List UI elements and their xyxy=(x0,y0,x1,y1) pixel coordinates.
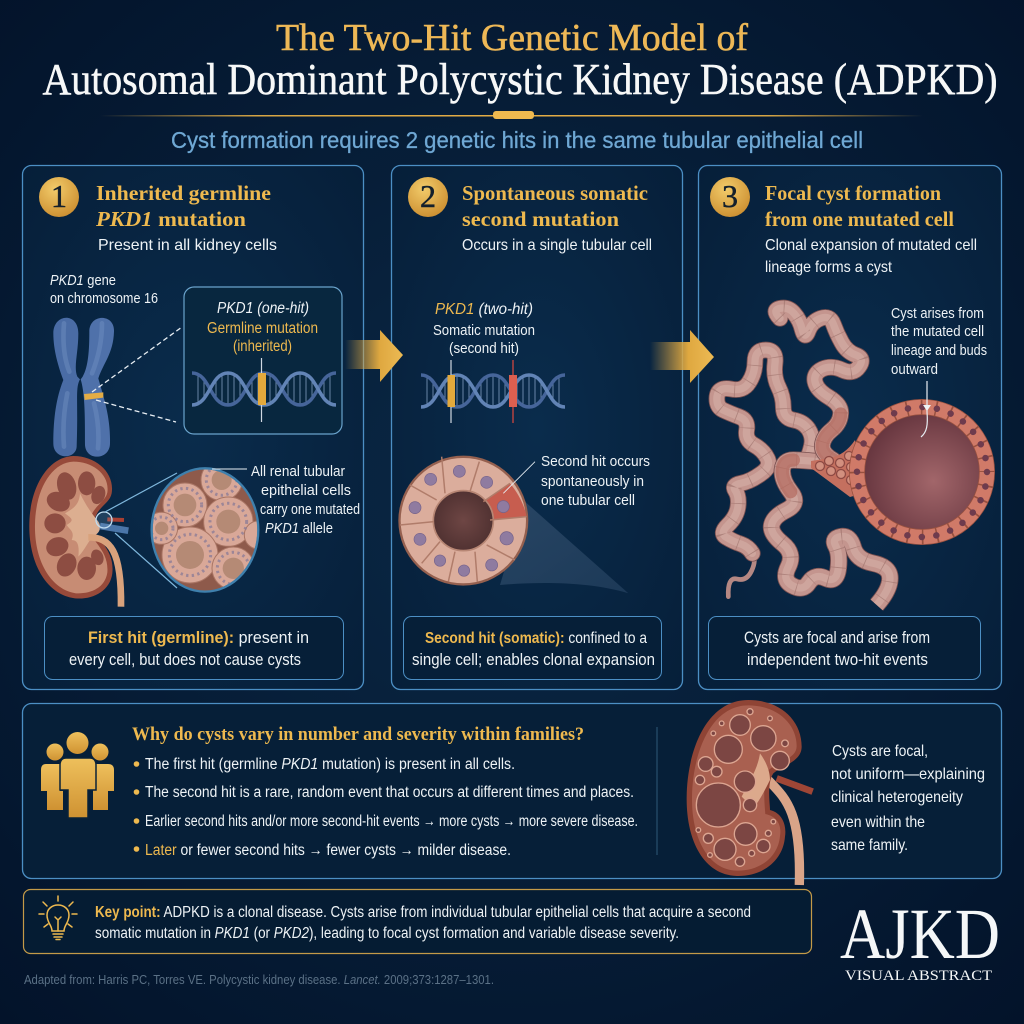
step 1 number badge xyxy=(39,177,79,217)
key point text xyxy=(95,904,751,942)
callout: PKD1 one-hit DNA: Germline mutation xyxy=(207,320,318,337)
key point text: Key point: ADPKD is a clonal disease. Cysts arise from individual tubular epithelial cells that acquire a second xyxy=(95,904,751,921)
gene location label xyxy=(50,273,158,307)
step 3 heading: from one mutated cell xyxy=(765,207,954,231)
gene location label: on chromosome 16 xyxy=(50,291,158,307)
title: The Two-Hit Genetic Model of xyxy=(276,17,748,59)
text: clinical heterogeneity note xyxy=(831,743,985,854)
label: second hit: one tubular cell xyxy=(541,492,635,509)
text: clinical heterogeneity note: not uniform—explaining xyxy=(831,766,985,783)
step 2 number badge xyxy=(408,177,448,217)
arrow: step 2 to step 3 xyxy=(650,330,714,383)
two-hit DNA diagram: Somatic mutation xyxy=(433,322,535,339)
two-hit DNA diagram xyxy=(421,301,565,423)
callout: PKD1 one-hit DNA: PKD1 (one-hit) xyxy=(217,300,309,317)
step 2 description: Occurs in a single tubular cell xyxy=(462,237,652,254)
step 2 number badge: 2 xyxy=(420,178,436,214)
step 1 heading xyxy=(95,181,271,231)
step 1 number badge: 1 xyxy=(51,178,67,214)
step 1 heading: Inherited germline xyxy=(96,181,271,205)
panel: step 2 somatic second mutation xyxy=(392,166,682,690)
text: clinical heterogeneity note: same family. xyxy=(831,837,908,854)
label: cyst origin: Cyst arises from xyxy=(891,306,984,322)
label: all renal cells: epithelial cells xyxy=(261,482,351,499)
key point text: somatic mutation in PKD1 (or PKD2), leading to focal cyst formation and variable disease severity. xyxy=(95,925,679,942)
callout: PKD1 one-hit DNA xyxy=(184,287,342,434)
callout: focal cysts: Cysts are focal and arise from xyxy=(744,629,930,647)
label: all renal cells: All renal tubular xyxy=(251,463,345,480)
callout: first hit: every cell, but does not cause cysts xyxy=(69,651,301,669)
text: clinical heterogeneity note: clinical heterogeneity xyxy=(831,789,963,806)
callout: second hit: single cell; enables clonal expansion xyxy=(412,651,655,669)
title divider xyxy=(100,111,923,119)
step 1 heading: PKD1 mutation xyxy=(95,207,246,231)
step 3 description xyxy=(765,237,977,276)
callout: second hit xyxy=(404,616,662,680)
label: second hit: Second hit occurs xyxy=(541,453,650,470)
label: cyst origin: the mutated cell xyxy=(891,324,984,340)
callout: first hit: First hit (germline): present in xyxy=(88,629,309,647)
panel: step 3 focal cyst formation xyxy=(698,166,1002,690)
step 3 number badge: 3 xyxy=(722,178,738,214)
text: clinical heterogeneity note: even within the xyxy=(831,814,925,831)
illustration: polycystic kidney xyxy=(687,700,813,885)
callout: first hit xyxy=(44,616,344,680)
step 2 heading: Spontaneous somatic xyxy=(462,181,648,205)
label: cyst origin: outward xyxy=(891,362,938,378)
callout: PKD1 one-hit DNA: (inherited) xyxy=(233,338,292,355)
icon: chromosome 16 xyxy=(53,318,114,457)
citation: Adapted from: Harris PC, Torres VE. Polycystic kidney disease. Lancet. 2009;373:1287–1301. xyxy=(24,972,494,987)
label: all renal cells: carry one mutated xyxy=(260,501,360,518)
dashed zoom lines xyxy=(92,327,182,422)
subtitle: Cyst formation requires 2 genetic hits in the same tubular epithelial cell xyxy=(171,127,863,153)
zoom lines to magnified view xyxy=(105,473,177,588)
step 3 heading xyxy=(765,181,954,231)
bullet list: The first hit (germline PKD1 mutation) is present in all cells. xyxy=(145,756,515,773)
bullet list xyxy=(134,756,638,859)
illustration: convoluted tubules xyxy=(717,308,890,605)
icon: lightbulb xyxy=(39,896,77,940)
step 3 description: Clonal expansion of mutated cell xyxy=(765,237,977,254)
logo: AJKD visual abstract: AJKD xyxy=(840,894,1000,974)
illustration: tubule ring with one mutated cell xyxy=(398,456,628,593)
callout: focal cysts xyxy=(708,616,980,680)
question heading: Why do cysts vary in number and severity within families? xyxy=(132,724,584,745)
bullet list: Earlier second hits and/or more second-hit events → more cysts → more severe disease. xyxy=(145,813,638,830)
step 3 heading: Focal cyst formation xyxy=(765,181,941,205)
illustration: magnified tubule cross-sections xyxy=(150,467,260,593)
panel: step 1 inherited germline mutation xyxy=(22,166,364,690)
step 3 description: lineage forms a cyst xyxy=(765,259,892,276)
callout: focal cysts: independent two-hit events xyxy=(747,651,928,669)
label: cyst origin: lineage and buds xyxy=(891,343,987,359)
label: all renal cells xyxy=(212,463,360,537)
step 2 heading xyxy=(462,181,648,231)
illustration: cyst budding from the tubule xyxy=(811,381,995,545)
label: cyst origin xyxy=(891,306,987,378)
callout: second hit: Second hit (somatic): confined to a xyxy=(425,630,647,647)
title xyxy=(42,17,998,104)
bullet list: Later or fewer second hits → fewer cysts → milder disease. xyxy=(145,842,511,859)
text: clinical heterogeneity note: Cysts are focal, xyxy=(832,743,928,760)
logo: AJKD visual abstract: VISUAL ABSTRACT xyxy=(845,968,992,984)
gene location label: PKD1 gene xyxy=(50,273,116,289)
panel: clinical heterogeneity xyxy=(22,700,1002,885)
two-hit DNA diagram: PKD1 (two-hit) xyxy=(435,301,533,318)
step 1 description: Present in all kidney cells xyxy=(98,237,277,254)
arrow: step 1 to step 2 xyxy=(345,330,403,382)
label: second hit xyxy=(541,453,650,509)
label: second hit: spontaneously in xyxy=(541,473,644,490)
step 3 number badge xyxy=(710,177,750,217)
step 2 heading: second mutation xyxy=(462,207,619,231)
bullet list: The second hit is a rare, random event that occurs at different times and places. xyxy=(145,784,634,801)
illustration: kidney cross-section xyxy=(29,456,128,607)
icon: family group xyxy=(41,732,114,818)
panel: key point xyxy=(24,890,812,954)
two-hit DNA diagram: (second hit) xyxy=(449,340,519,357)
label: all renal cells: PKD1 allele xyxy=(265,520,333,537)
